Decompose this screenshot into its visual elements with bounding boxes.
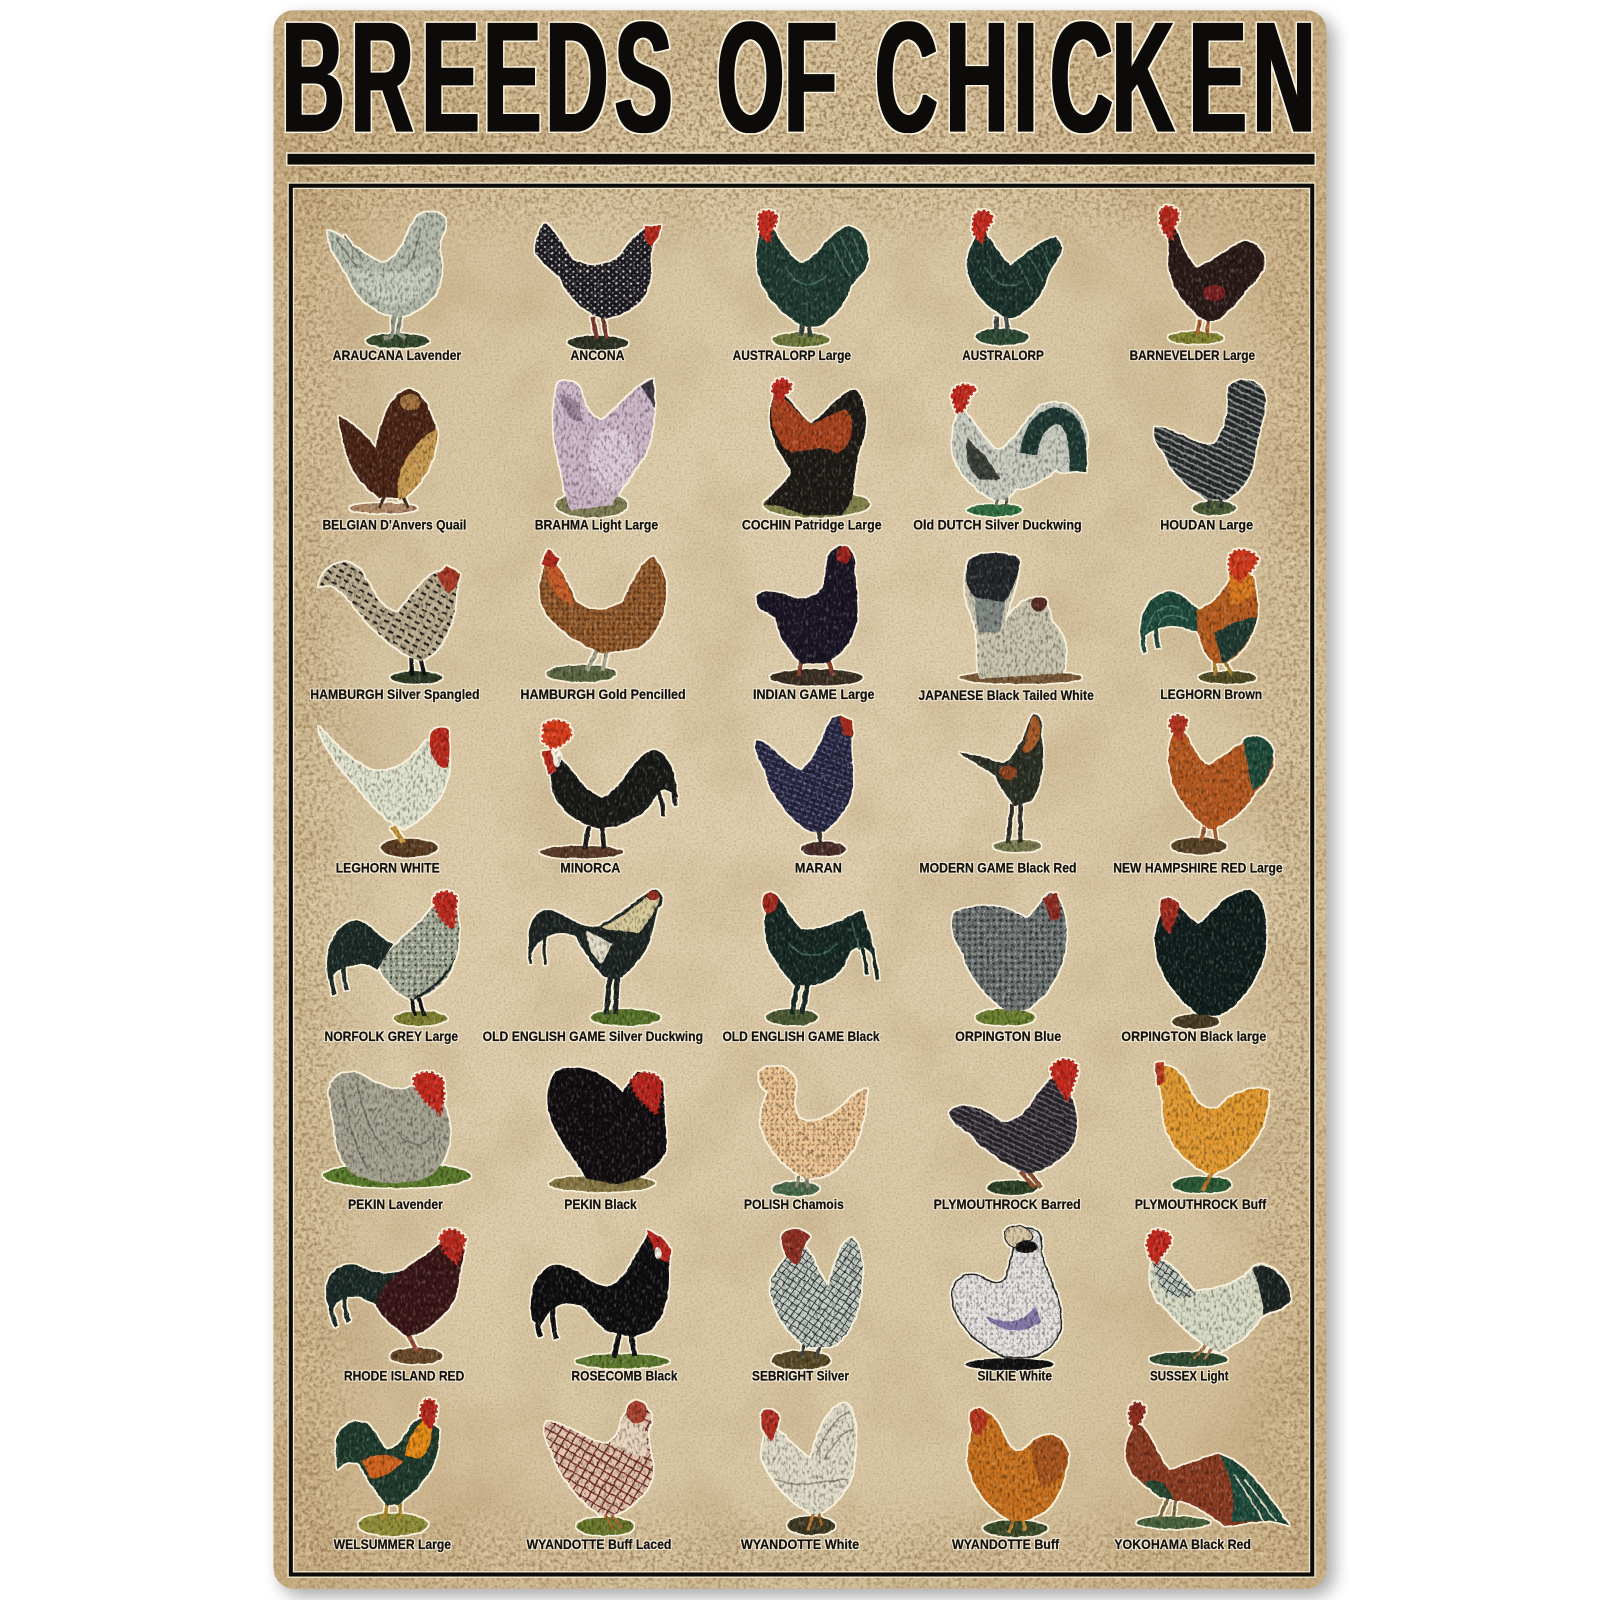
label: MINORCA (560, 860, 620, 876)
label: JAPANESE Black Tailed White (918, 688, 1094, 704)
label: SEBRIGHT Silver (752, 1369, 849, 1385)
icon: Rhode Island Red (326, 1230, 465, 1364)
label: Old DUTCH Silver Duckwing (913, 518, 1082, 534)
breed: Hamburgh Gold Pencilled (520, 549, 686, 703)
label: NEW HAMPSHIRE RED Large (1113, 860, 1283, 876)
icon: Orpington Blue (952, 893, 1066, 1026)
breed: Wyandotte Buff (952, 1408, 1068, 1553)
breed: Wyandotte White (741, 1403, 859, 1553)
label: LEGHORN Brown (1160, 687, 1262, 703)
breed: Welsummer Large (334, 1400, 451, 1553)
label: ORPINGTON Black large (1121, 1029, 1266, 1045)
icon: Wyandotte Buff Laced (544, 1401, 653, 1536)
icon: Brahma Light Large (553, 379, 655, 517)
icon: Norfolk Grey Large (327, 892, 459, 1026)
icon: Modern Game Black Red (959, 714, 1043, 852)
label: POLISH Chamois (744, 1197, 844, 1213)
icon: Sebright Silver (770, 1229, 862, 1369)
breed: Rhode Island Red (326, 1230, 465, 1385)
title (282, 0, 1315, 166)
label: RHODE ISLAND RED (344, 1369, 464, 1385)
label: PEKIN Black (564, 1197, 637, 1213)
label: NORFOLK GREY Large (324, 1029, 458, 1045)
breed: Yokohama Black Red (1114, 1403, 1289, 1553)
metal sign plate (273, 10, 1327, 1589)
icon: Australorp (967, 211, 1062, 345)
label: MODERN GAME Black Red (919, 860, 1077, 876)
icon: Japanese Black Tailed White (959, 553, 1082, 684)
label: WYANDOTTE White (741, 1537, 859, 1553)
icon: Polish Chamois (759, 1066, 867, 1196)
label: BRAHMA Light Large (535, 518, 658, 534)
label: BELGIAN D'Anvers Quail (322, 518, 466, 534)
breed: Australorp Large (733, 211, 868, 364)
breed: Maran (756, 715, 853, 876)
breed: Old English Game Black (722, 892, 880, 1045)
chart frame (291, 186, 1312, 1574)
breed: Orpington Blue (952, 893, 1066, 1045)
label: WELSUMMER Large (334, 1537, 451, 1553)
breed: Pekin Black (547, 1067, 666, 1213)
icon: Wyandotte White (761, 1403, 856, 1535)
icon: Orpington Black Large (1155, 890, 1266, 1029)
breed: Minorca (540, 721, 678, 876)
icon: Minorca (540, 721, 678, 858)
label: AUSTRALORP (962, 348, 1044, 364)
icon: Houdan Large (1154, 380, 1265, 515)
breed: Polish Chamois (744, 1066, 867, 1213)
icon: Old English Game Black (762, 892, 878, 1026)
icon: Wyandotte Buff (967, 1408, 1068, 1537)
label: YOKOHAMA Black Red (1114, 1537, 1251, 1553)
label: LEGHORN WHITE (336, 860, 440, 876)
label: HAMBURGH Gold Pencilled (520, 687, 686, 703)
icon: Plymouthrock Buff (1155, 1061, 1269, 1193)
icon: Araucana hen (328, 212, 446, 348)
breed: Barnevelder Large (1130, 207, 1264, 364)
breed: New Hampshire Red Large (1113, 716, 1283, 876)
icon: Yokohama Black Red (1126, 1403, 1289, 1529)
label: HOUDAN Large (1160, 518, 1253, 534)
icon: Cochin Partridge Large (763, 380, 869, 517)
breed: Silkie White (952, 1225, 1061, 1385)
breed: Old English Game Silver Duckwing (483, 890, 703, 1045)
label: INDIAN GAME Large (753, 687, 875, 703)
breed: Plymouthrock Barred (934, 1060, 1081, 1213)
breed: Leghorn Brown (1140, 550, 1262, 703)
breed: Brahma Light Large (535, 379, 658, 534)
icon: Plymouthrock Barred (949, 1060, 1078, 1195)
icon: Welsummer Large (336, 1400, 439, 1536)
label: HAMBURGH Silver Spangled (310, 687, 480, 703)
breed: Orpington Black Large (1121, 890, 1266, 1045)
breed: Ancona (535, 222, 661, 364)
label: PEKIN Lavender (348, 1197, 443, 1213)
icon: Hamburgh Gold Pencilled (540, 549, 666, 682)
icon: Old English Game Silver Duckwing (529, 890, 662, 1026)
label: ROSECOMB Black (571, 1369, 678, 1385)
breed: Cochin Partridge Large (742, 380, 882, 534)
label: COCHIN Patridge Large (742, 518, 882, 534)
label: WYANDOTTE Buff Laced (527, 1537, 671, 1553)
icon: Pekin Black (547, 1067, 666, 1192)
breed: Modern Game Black Red (919, 714, 1077, 876)
icon: Rosecomb Black (531, 1230, 671, 1368)
label: PLYMOUTHROCK Buff (1135, 1197, 1267, 1213)
breed: Belgian D'Anvers Quail (322, 389, 466, 534)
breed: Houdan Large (1154, 380, 1265, 534)
icon: Ancona hen (535, 222, 661, 350)
icon: Indian Game Large (756, 546, 862, 686)
label: AUSTRALORP Large (733, 348, 851, 364)
label: SUSSEX Light (1150, 1369, 1229, 1385)
label: MARAN (795, 860, 842, 876)
label: SILKIE White (978, 1369, 1052, 1385)
breed: Wyandotte Buff Laced (527, 1401, 671, 1553)
panel: chicken breeds grid (310, 207, 1291, 1553)
icon: Silkie White (952, 1225, 1061, 1370)
breed: Pekin Lavender (323, 1073, 470, 1213)
label: ANCONA (570, 348, 624, 364)
label: BARNEVELDER Large (1130, 348, 1255, 364)
breed: Sussex Light (1147, 1231, 1291, 1385)
label: OLD ENGLISH GAME Silver Duckwing (483, 1029, 703, 1045)
breed: Hamburgh Silver Spangled (310, 563, 480, 703)
icon: Barnevelder Large (1160, 207, 1264, 344)
icon: Belgian D'Anvers Quail (340, 389, 437, 513)
label: PLYMOUTHROCK Barred (934, 1197, 1081, 1213)
icon: Maran (756, 715, 853, 856)
icon: Leghorn Brown (1140, 550, 1258, 684)
label: ARAUCANA Lavender (333, 348, 462, 364)
breed: Rosecomb Black (531, 1230, 678, 1385)
breed: Leghorn White (318, 727, 449, 876)
breed: Araucana Lavender (328, 212, 462, 364)
breed: Sebright Silver (752, 1229, 862, 1385)
icon: Australorp Large (757, 211, 868, 347)
icon: Pekin Lavender (323, 1073, 470, 1188)
label: OLD ENGLISH GAME Black (722, 1029, 880, 1045)
label: ORPINGTON Blue (955, 1029, 1061, 1045)
breed: Old Dutch Silver Duckwing (913, 385, 1088, 534)
plate shadow (280, 16, 1335, 1597)
breed: Japanese Black Tailed White (918, 553, 1094, 704)
breed: Indian Game Large (753, 546, 875, 703)
icon: Hamburgh Silver Spangled (318, 563, 460, 684)
breed: Australorp (962, 211, 1062, 364)
icon: New Hampshire Red Large (1168, 716, 1274, 854)
label: WYANDOTTE Buff (952, 1537, 1059, 1553)
icon: Old Dutch Silver Duckwing (952, 385, 1088, 516)
icon: Leghorn White (318, 727, 449, 857)
icon: Sussex Light (1147, 1231, 1291, 1366)
breed: Norfolk Grey Large (324, 892, 459, 1045)
title rule (287, 153, 1315, 165)
breed: Plymouthrock Buff (1135, 1061, 1269, 1213)
